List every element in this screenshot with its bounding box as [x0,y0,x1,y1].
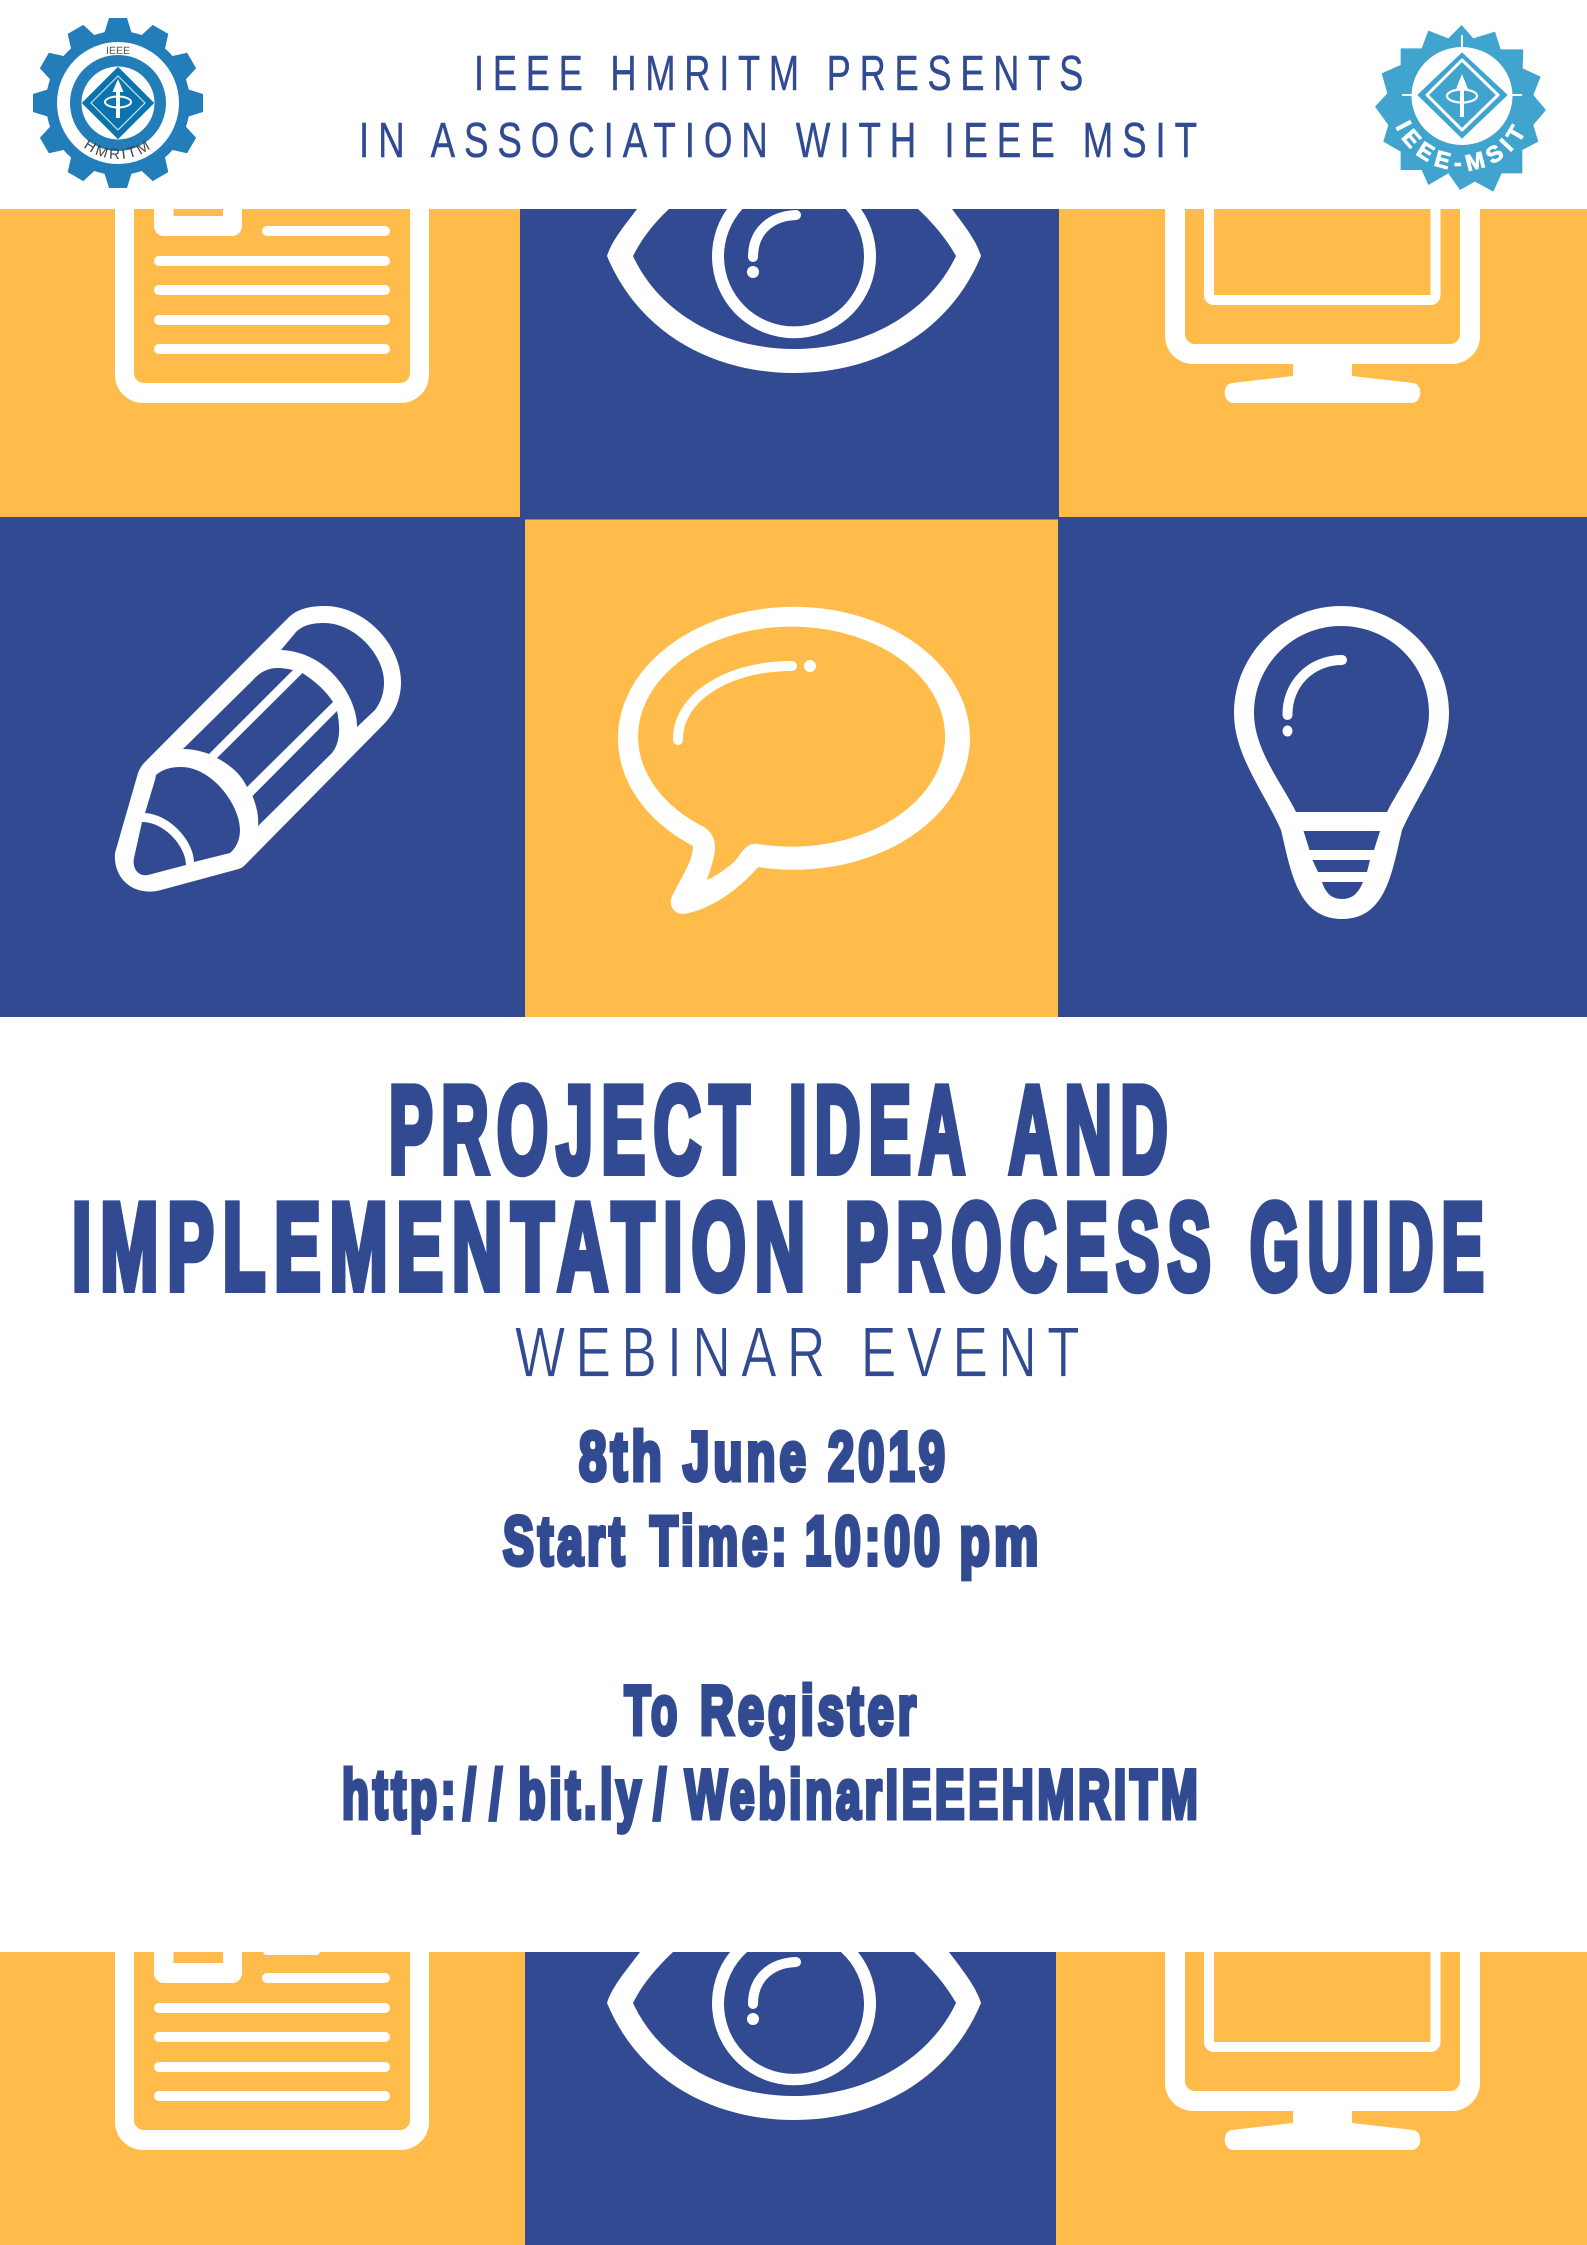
title: PROCESS [845,1179,1219,1316]
heading: presenters: IN ASSOCIATION WITH IEEE MSIT [359,113,1206,168]
event date and time: Time: [650,1502,790,1580]
event date and time: 2019 [828,1418,949,1495]
panel: bottom row, clipboard tile [0,1952,525,2245]
heading: presenters: IEEE HMRITM PRESENTS [474,46,1092,101]
logo: IEEE HMRITM gear: HMRITM [84,139,150,160]
icon: eye, bottom [607,1952,981,2120]
heading: presenters [359,46,1206,168]
event date and time [503,1418,1042,1580]
event date and time: Start [503,1502,628,1580]
registration link: http://bit.ly/WebinarIEEEHMRITM [342,1756,1202,1833]
registration link: Register [700,1672,920,1749]
icon: speech bubble [618,607,970,914]
panel: middle row, speech bubble tile [525,520,1058,1017]
logo: IEEE HMRITM gear: IEEE [106,45,130,57]
event date and time: 8th [579,1418,666,1495]
panel: middle row, pencil tile [0,517,525,1017]
registration link [342,1672,1202,1833]
title: IDEA [789,1062,973,1199]
logo: IEEE MSIT spiked seal: IEEE-MSIT [1396,120,1524,172]
panel: bottom row, eye tile [525,1952,1056,2245]
icon: monitor, bottom [1165,1952,1480,2150]
icon: clipboard, bottom [115,1952,429,2150]
logo: IEEE MSIT spiked seal [1375,25,1546,192]
panel: top row, monitor tile [1059,209,1587,517]
panel: bottom row, monitor tile [1056,1952,1587,2245]
subtitle: WEBINAR EVENT [515,1314,1090,1392]
title: IMPLEMENTATION [72,1179,814,1316]
icon: monitor, top [1165,209,1480,403]
registration link: To [624,1672,681,1749]
panel: middle row, light bulb tile [1058,517,1587,1017]
title: AND [1009,1062,1176,1199]
title: PROJECT [389,1062,758,1199]
panel: top row, eye tile [520,209,1059,520]
icon: eye, top [607,209,981,373]
icon: light bulb [1234,606,1449,919]
title [72,1062,1492,1316]
panel: top row, clipboard tile [0,209,520,517]
icon: clipboard, top [115,209,429,403]
event date and time: June [683,1418,810,1495]
event date and time: pm [960,1502,1042,1580]
logo: IEEE HMRITM gear [33,18,203,188]
icon: pencil [115,606,401,892]
event date and time: 10:00 [805,1502,944,1580]
